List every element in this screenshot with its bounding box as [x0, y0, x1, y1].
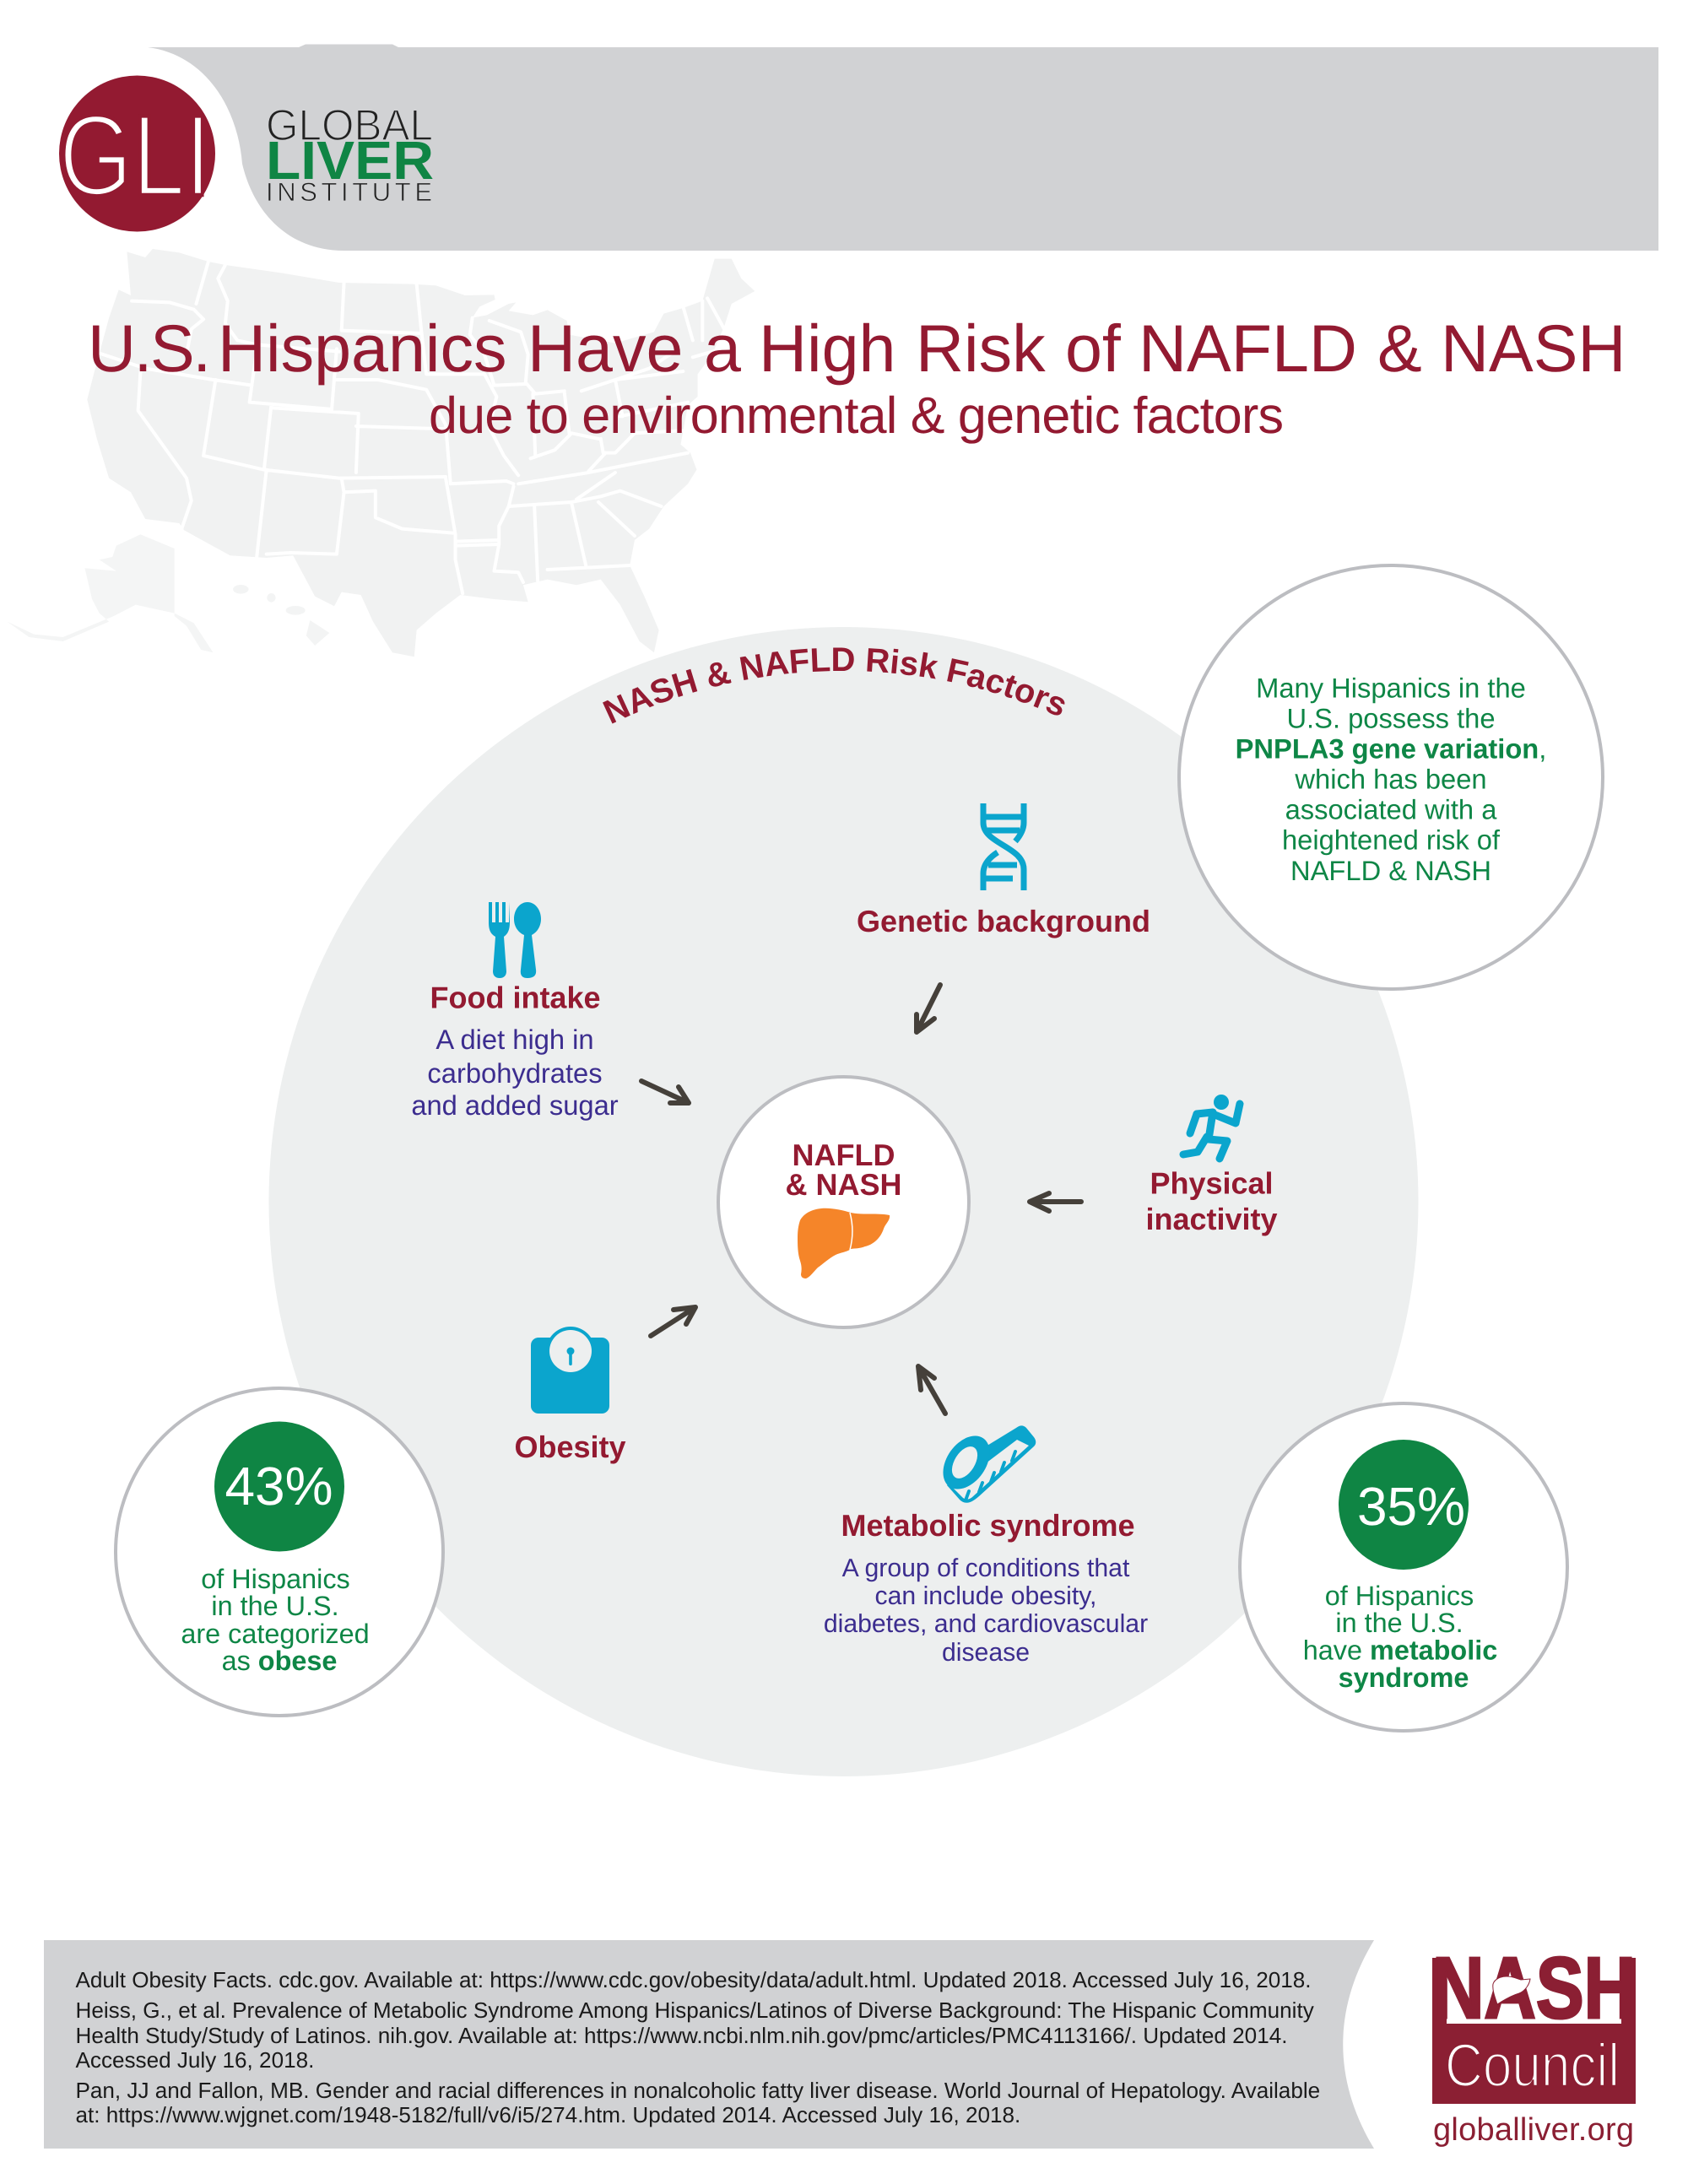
logo: Global Liver Institute wordmark: GLOBAL: [266, 101, 433, 150]
factor: food intake: [411, 902, 619, 1121]
stat: 43% obese: 43%: [225, 1456, 333, 1516]
title: Have: [528, 311, 683, 386]
arrow: physical inactivity to center: [1030, 1193, 1081, 1211]
arrow: food to center: [641, 1081, 689, 1103]
stat: 35% metabolic syndrome: in the U.S.: [1335, 1608, 1463, 1638]
panel: risk factors disc: [268, 627, 1418, 1776]
factor: food intake: carbohydrates: [427, 1057, 603, 1089]
icon: runner: [1183, 1095, 1240, 1159]
logo: NASH Council: NASH: [1432, 1939, 1636, 2036]
title: of: [1065, 311, 1122, 386]
title: Hispanics: [218, 311, 506, 386]
factor: metabolic syndrome: diabetes, and cardiovascular: [824, 1610, 1148, 1638]
arrow: obesity to center: [651, 1307, 695, 1336]
callout: PNPLA3 gene variation: Many Hispanics in the: [1256, 672, 1526, 704]
stat: 43% obese: [116, 1388, 443, 1716]
factor: food intake: and added sugar: [411, 1089, 619, 1121]
logo: Global Liver Institute wordmark: LIVER: [266, 130, 434, 191]
stat: 43% obese: are categorized: [181, 1619, 370, 1649]
center circle: NAFLD & NASH: & NASH: [785, 1167, 902, 1202]
stat: 35% metabolic syndrome: of Hispanics: [1325, 1581, 1474, 1611]
title: NAFLD: [1139, 311, 1357, 386]
title: a: [704, 311, 741, 386]
logo: GLI circle: GLI: [59, 91, 211, 219]
stat: 43% obese: as obese: [222, 1646, 337, 1676]
header band: [148, 44, 1658, 251]
icon: scale: [531, 1327, 609, 1414]
factor: metabolic syndrome: [824, 1425, 1148, 1667]
footer band with references: Health Study/Study of Latinos. nih.gov. Available at: https://www.ncbi.nlm.nih.gov/pmc/articles/PMC4113166/. Updated 2014.: [76, 2023, 1287, 2048]
footer band with references: at: https://www.wjgnet.com/1948-5182/full/v6/i5/274.htm. Updated 2014. Accessed July 16, 2018.: [76, 2102, 1020, 2127]
logo: Global Liver Institute wordmark: [266, 101, 434, 207]
logo: NASH Council: Council: [1445, 2032, 1620, 2100]
factor: obesity: Obesity: [514, 1430, 626, 1464]
factor: physical inactivity: inactivity: [1145, 1202, 1278, 1236]
footer band with references: Heiss, G., et al. Prevalence of Metabolic Syndrome Among Hispanics/Latinos of Diverse Background: The Hispanic Community: [76, 1997, 1314, 2023]
stat: 35% metabolic syndrome: 35%: [1357, 1476, 1465, 1537]
stat: 35% metabolic syndrome: have metabolic: [1303, 1635, 1497, 1666]
title: &: [1377, 311, 1422, 386]
callout: PNPLA3 gene variation: U.S. possess the: [1286, 702, 1496, 734]
footer band with references: Adult Obesity Facts. cdc.gov. Available at: https://www.cdc.gov/obesity/data/adult.html. Updated 2018. Accessed July 16, 2018.: [76, 1967, 1312, 1992]
factor: food intake: A diet high in: [436, 1024, 594, 1055]
subtitle: due to environmental & genetic factors: [429, 387, 1284, 444]
callout: PNPLA3 gene variation: NAFLD & NASH: [1290, 855, 1491, 886]
center circle: NAFLD & NASH: [718, 1077, 969, 1327]
background map of the United States: [8, 249, 755, 657]
title: U.S.: [88, 311, 209, 386]
callout: PNPLA3 gene variation: which has been: [1294, 763, 1487, 795]
icon: DNA helix: [983, 803, 1024, 890]
logo: Global Liver Institute wordmark: INSTITUTE: [266, 177, 432, 207]
title: Risk: [916, 311, 1046, 386]
website url: globalliver.org: [1433, 2112, 1634, 2148]
factor: food intake: Food intake: [430, 981, 601, 1014]
factor: physical inactivity: Physical: [1150, 1166, 1274, 1200]
callout: PNPLA3 gene variation: [1179, 565, 1603, 989]
factor: metabolic syndrome: Metabolic syndrome: [841, 1508, 1135, 1543]
factor: physical inactivity: [1145, 1095, 1278, 1236]
icon: liver: [798, 1208, 890, 1279]
arrow: metabolic syndrome to center: [918, 1366, 945, 1414]
logo: NASH Council: [1432, 1939, 1636, 2104]
stat: 35% metabolic syndrome: [1240, 1403, 1567, 1731]
callout: PNPLA3 gene variation: PNPLA3 gene variation,: [1236, 733, 1546, 765]
center circle: NAFLD & NASH: NAFLD: [793, 1138, 895, 1172]
factor: genetic background: [857, 803, 1150, 938]
stat: 35% metabolic syndrome: syndrome: [1339, 1662, 1469, 1693]
panel heading: curved risk factors title: NASH & NAFLD Risk Factors: [603, 648, 1065, 724]
factor: metabolic syndrome: disease: [942, 1639, 1030, 1667]
factor: metabolic syndrome: can include obesity,: [875, 1582, 1096, 1610]
icon: measuring tape: [933, 1425, 1036, 1503]
factor: metabolic syndrome: A group of conditions that: [842, 1554, 1130, 1582]
footer band with references: Pan, JJ and Fallon, MB. Gender and racial differences in nonalcoholic fatty liver disease. World Journal of Hepatology. Available: [76, 2078, 1320, 2103]
footer band with references: [44, 1940, 1374, 2149]
footer band with references: Accessed July 16, 2018.: [76, 2047, 314, 2073]
title: NASH: [1441, 311, 1626, 386]
title: High: [759, 311, 895, 386]
factor: obesity: [514, 1327, 626, 1464]
callout: PNPLA3 gene variation: associated with a: [1285, 793, 1497, 825]
callout: PNPLA3 gene variation: heightened risk of: [1282, 824, 1501, 856]
stat: 43% obese: of Hispanics: [201, 1564, 350, 1594]
icon: fork and spoon: [489, 902, 541, 978]
factor: genetic background: Genetic background: [857, 904, 1150, 938]
stat: 43% obese: in the U.S.: [211, 1591, 339, 1621]
arrow: genetic to center: [917, 985, 940, 1032]
